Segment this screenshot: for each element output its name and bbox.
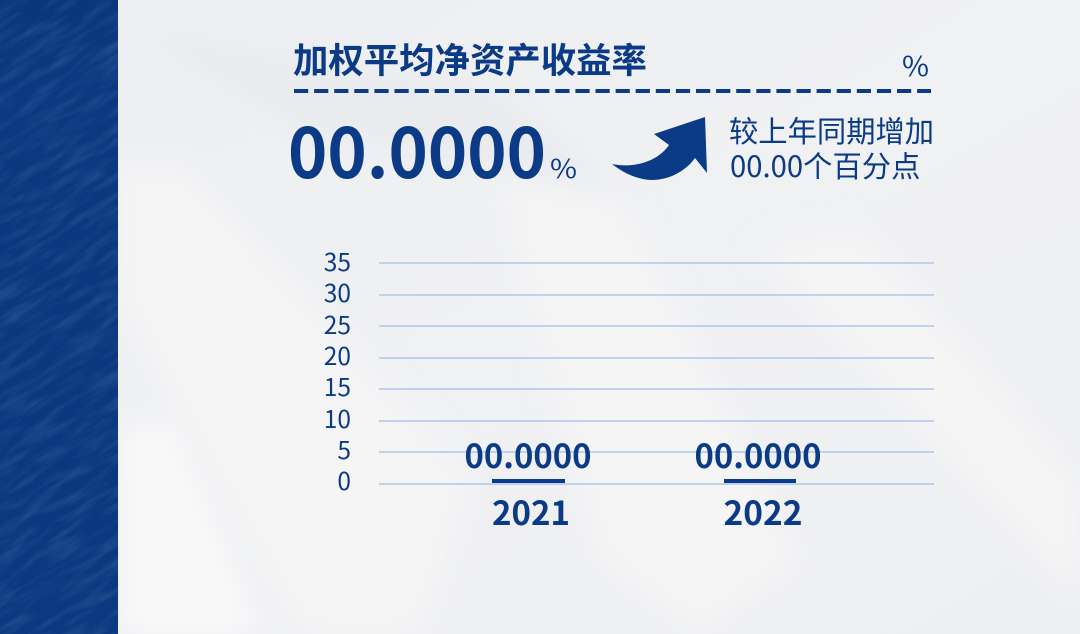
bar: 2022 — [694, 430, 822, 535]
y axis labels: 25 — [324, 307, 351, 342]
change description: 较上年同期增加 — [729, 109, 934, 151]
title: 加权平均净资产收益率 — [293, 33, 647, 84]
main value unit: % — [550, 149, 577, 186]
y axis labels: 5 — [337, 432, 351, 467]
y axis labels: 30 — [324, 275, 351, 310]
y axis labels: 20 — [324, 338, 351, 373]
y axis labels: 0 — [337, 463, 351, 498]
y axis labels: 15 — [324, 369, 351, 404]
bar chart — [324, 244, 934, 535]
panel: textured blue sidebar — [0, 0, 118, 634]
bar: 2021: 00.0000 — [464, 430, 592, 478]
bar: 2021 — [464, 430, 592, 535]
bar: 2022: 00.0000 — [694, 430, 822, 478]
main value: 00.0000 — [288, 98, 546, 198]
bar: 2022: 2022 — [724, 487, 802, 535]
icon: rising arrow — [612, 117, 707, 180]
dashed divider — [294, 89, 931, 93]
change description — [729, 109, 934, 186]
grid lines — [379, 263, 934, 484]
bar: 2021: 2021 — [492, 487, 570, 535]
change description: 00.00个百分点 — [730, 144, 920, 186]
y axis labels — [324, 244, 351, 498]
y axis labels: 35 — [324, 244, 351, 279]
y axis labels: 10 — [324, 401, 351, 436]
title unit: % — [902, 45, 929, 84]
